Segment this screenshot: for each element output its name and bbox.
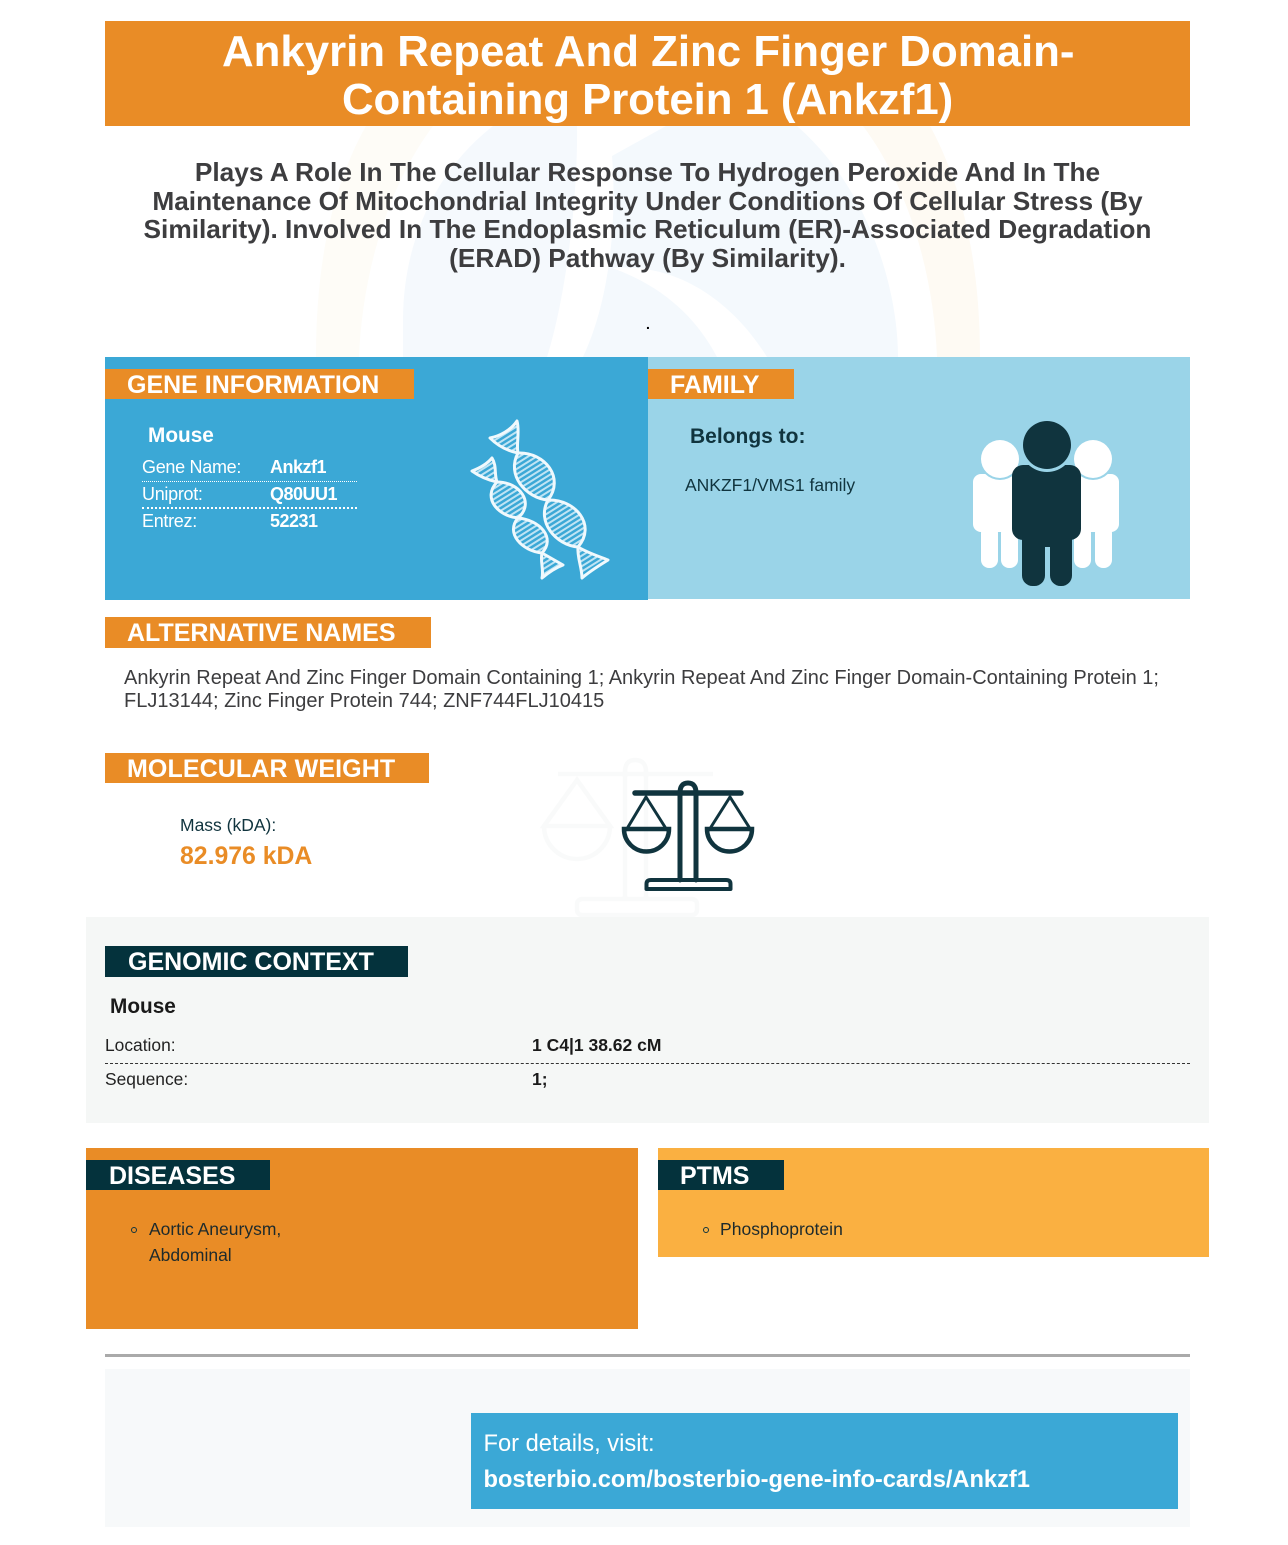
bullet bbox=[703, 1227, 709, 1233]
heading: diseases bbox=[86, 1160, 270, 1190]
gene table: Uniprot: bbox=[142, 484, 203, 504]
title line 2: Containing Protein 1 (Ankzf1) bbox=[342, 75, 953, 124]
alternative names text: FLJ13144; Zinc Finger Protein 744; ZNF744FLJ10415 bbox=[124, 690, 604, 712]
icon: faint scale watermark bbox=[535, 755, 725, 917]
gene table: Q80UU1 bbox=[270, 484, 337, 504]
gene table: Gene Name: bbox=[142, 457, 241, 477]
disease text: Aortic Aneurysm, bbox=[149, 1219, 281, 1239]
callout url: bosterbio.com/bosterbio-gene-info-cards/Ankzf1 bbox=[484, 1467, 1030, 1493]
dot: . bbox=[646, 316, 650, 332]
summary text: Similarity). Involved In The Endoplasmic Reticulum (ER)-Associated Degradation bbox=[144, 214, 1151, 244]
panel: gene information bbox=[105, 357, 648, 600]
gene table: 52231 bbox=[270, 511, 318, 531]
location value: 1 C4|1 38.62 cM bbox=[532, 1035, 661, 1055]
disease text bbox=[149, 1219, 281, 1265]
mass value: 82.976 kDA bbox=[180, 843, 312, 870]
icon: people bbox=[973, 421, 1119, 586]
family name: ANKZF1/VMS1 family bbox=[685, 475, 855, 495]
bullet bbox=[131, 1227, 137, 1233]
icon: dna bbox=[470, 419, 610, 580]
background watermark bbox=[403, 126, 980, 357]
belongs to label: Belongs to: bbox=[690, 425, 806, 448]
location label: Location: bbox=[105, 1035, 176, 1055]
heading: genomic context: GENOMIC CONTEXT bbox=[128, 948, 374, 976]
heading: diseases: DISEASES bbox=[109, 1162, 235, 1190]
gene table: Ankzf1 bbox=[270, 457, 326, 477]
species label: Mouse bbox=[110, 995, 176, 1018]
sequence label: Sequence: bbox=[105, 1069, 188, 1089]
title line 1: Ankyrin Repeat And Zinc Finger Domain- bbox=[222, 27, 1074, 76]
callout label: For details, visit: bbox=[484, 1431, 655, 1457]
panel: diseases bbox=[86, 1148, 638, 1329]
icon: scale bbox=[622, 780, 754, 891]
summary text: Plays A Role In The Cellular Response To Hydrogen Peroxide And In The bbox=[195, 157, 1100, 187]
heading: ptms bbox=[658, 1160, 784, 1190]
alternative names text: Ankyrin Repeat And Zinc Finger Domain Containing 1; Ankyrin Repeat And Zinc Finger Domain-Containing Protein 1; bbox=[124, 667, 1159, 689]
heading: family bbox=[648, 369, 794, 399]
panel: family bbox=[648, 357, 1190, 599]
panel: genomic context bbox=[86, 917, 1209, 1123]
heading: gene information: GENE INFORMATION bbox=[127, 371, 379, 399]
panel: footer bbox=[105, 1369, 1190, 1527]
gene table: Entrez: bbox=[142, 511, 197, 531]
heading: alternative names: ALTERNATIVE NAMES bbox=[127, 619, 396, 647]
title banner bbox=[105, 21, 1190, 126]
summary text bbox=[144, 157, 1151, 273]
mass label: Mass (kDA): bbox=[180, 815, 276, 835]
summary text: Maintenance Of Mitochondrial Integrity Under Conditions Of Cellular Stress (By bbox=[152, 186, 1143, 216]
ptm text: Phosphoprotein bbox=[720, 1219, 843, 1239]
heading: molecular weight: MOLECULAR WEIGHT bbox=[127, 755, 395, 783]
summary text: (ERAD) Pathway (By Similarity). bbox=[449, 243, 846, 273]
disease text: Abdominal bbox=[149, 1245, 232, 1265]
callout: details link bbox=[471, 1413, 1178, 1509]
heading: ptms: PTMS bbox=[680, 1162, 749, 1190]
sequence value: 1; bbox=[532, 1069, 548, 1089]
alternative names text bbox=[124, 667, 1159, 712]
species label: Mouse bbox=[148, 424, 214, 447]
gene table bbox=[142, 457, 357, 531]
heading: family: FAMILY bbox=[670, 371, 759, 399]
panel: ptms bbox=[658, 1148, 1209, 1257]
